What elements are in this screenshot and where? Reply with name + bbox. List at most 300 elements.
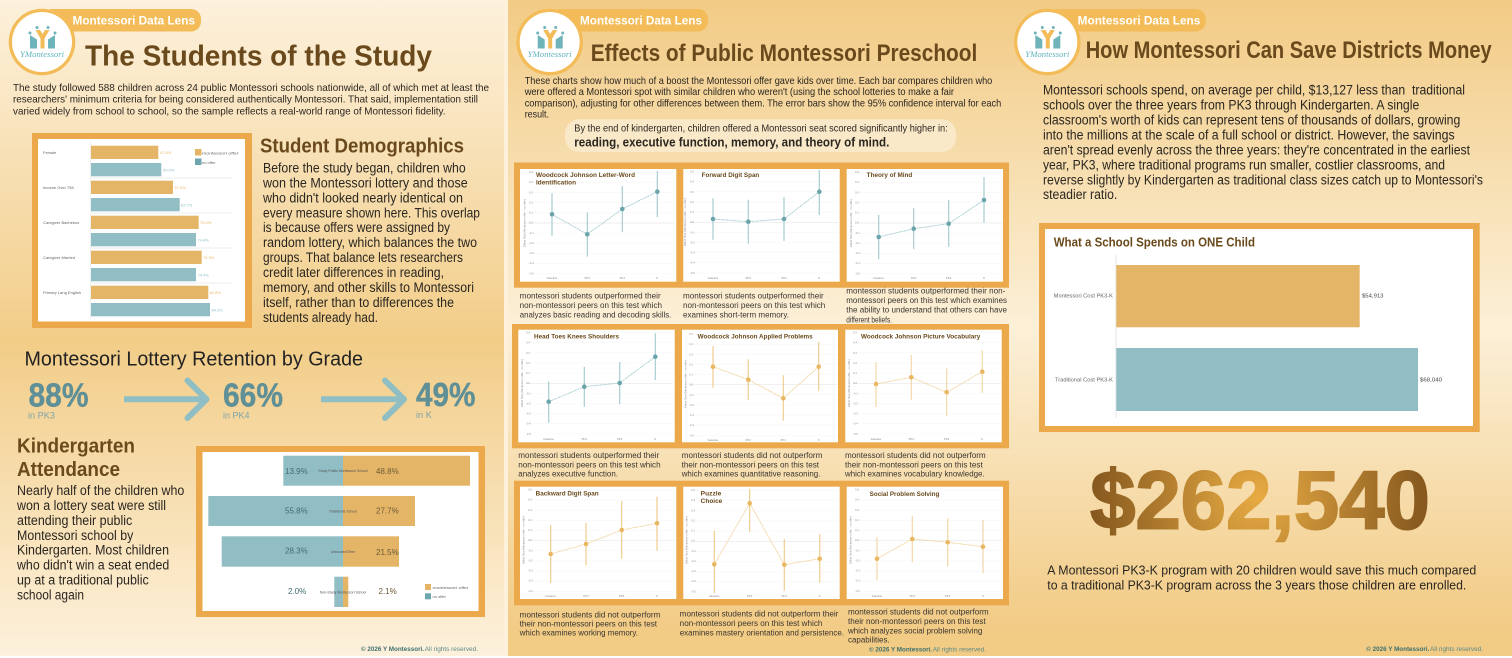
line chart: Woodcock Johnson Picture Vocabulary: 0.4 (853, 341, 857, 345)
captions: row 2: montessori students did not outperform (682, 451, 823, 460)
line chart: Woodcock Johnson Applied Problems: -0.5 (689, 433, 694, 437)
legend (195, 149, 239, 165)
line chart: Social Problem Solving: 0.3 (855, 508, 859, 512)
chart band: row 2 (512, 324, 1009, 448)
line chart: Head Toes Knees Shoulders: -0.5 (526, 432, 531, 436)
row: Unknown/Other: Unknown/Other (331, 550, 356, 554)
panel: Effects of Public Montessori Preschool (508, 0, 1009, 656)
line chart: Woodcock Johnson Letter-Word Identification: Woodcock Johnson Letter-Word (536, 173, 635, 179)
text block: demographics: Before the study began, children who (263, 160, 466, 176)
callout: By the end of kindergarten, children offered a Montessori seat scored significantly higher in: (574, 123, 948, 134)
icon: Y Montessori logo (516, 9, 583, 75)
line chart: Backward Digit Span: 0.4 (528, 498, 532, 502)
captions: row 3: examines mastery orientation and persistence. (680, 628, 844, 637)
line chart: Puzzle Choice: -0.2 (691, 559, 696, 563)
line chart: Woodcock Johnson Applied Problems: -0.4 (689, 423, 694, 427)
brand pill: Montessori Data Lens (72, 15, 195, 27)
line chart: Woodcock Johnson Picture Vocabulary: 0.3 (853, 351, 857, 355)
captions: row 3: their non-montessori peers on this test (848, 617, 986, 626)
icon: Y Montessori logo: YMontessori (20, 50, 64, 59)
line chart: Woodcock Johnson Letter-Word Identification: Identification (536, 180, 576, 186)
line chart: Social Problem Solving: -0.5 (855, 589, 860, 593)
captions: row 1: the ability to understand that others can have (846, 305, 1008, 314)
line chart: Puzzle Choice: 0.3 (691, 508, 695, 512)
text block: savings: year, PK3, where traditional programs run smaller, costlier classrooms, and (1043, 157, 1445, 172)
footer (361, 645, 478, 653)
icon: Y Montessori logo: YMontessori (1025, 50, 1069, 59)
intro text: The study followed 588 children across 24 public Montessori schools nationwide, all of which met at least the (13, 83, 489, 94)
icon: Y Montessori logo: YMontessori (528, 50, 572, 59)
row: Traditional School: 27.7% (376, 506, 399, 516)
line chart: Theory of Mind: 0.1 (855, 211, 859, 215)
line chart: Social Problem Solving: 0.5 (855, 488, 859, 492)
line chart: Head Toes Knees Shoulders: PK4 (617, 437, 623, 441)
line chart: Social Problem Solving: 0.2 (855, 518, 859, 522)
row: Unknown/Other: 28.3% (285, 546, 308, 555)
line chart: Woodcock Johnson Picture Vocabulary: PK4 (944, 437, 950, 441)
row: Caregiver Married: 74.4% (198, 272, 209, 277)
heading: Student Demographics: Student Demographics (260, 136, 464, 158)
line chart: Head Toes Knees Shoulders: 0.2 (526, 361, 530, 365)
footer: All rights reserved. (933, 647, 986, 654)
legend: montessori offer (202, 150, 239, 156)
line chart: Theory of Mind: baseline (873, 276, 884, 280)
row: Caregiver Married (43, 251, 215, 281)
row: Caregiver Married: 78.3% (203, 255, 215, 260)
line chart: Woodcock Johnson Letter-Word Identification: -0.5 (529, 271, 534, 275)
line chart: Forward Digit Span: -0.2 (690, 240, 695, 244)
captions: row 1: analyzes basic reading and decoding skills. (520, 310, 671, 319)
line chart: Forward Digit Span: K (818, 276, 820, 280)
captions: row 3: montessori students did not outperform (520, 610, 661, 619)
caption: savings (1047, 563, 1476, 593)
line chart: Social Problem Solving: baseline (872, 594, 883, 598)
line chart: Social Problem Solving: -0.4 (855, 579, 860, 583)
line chart: Woodcock Johnson Picture Vocabulary: Woodcock Johnson Picture Vocabulary (861, 335, 981, 341)
line chart: Woodcock Johnson Picture Vocabulary: 0.5 (853, 330, 857, 334)
intro text: varied widely from school to school, so the sample reflects a real-world range of Montessori fidelity. (13, 106, 446, 117)
line chart: Woodcock Johnson Letter-Word Identification: 0.1 (529, 211, 533, 215)
line chart: Puzzle Choice: -0.1 (691, 549, 696, 553)
line chart: Woodcock Johnson Applied Problems: 0.0 (689, 383, 693, 387)
line chart: Puzzle Choice: 0.5 (691, 488, 695, 492)
text block: savings: Montessori schools spend, on average per child, $13,127 less than traditional (1043, 83, 1465, 98)
text block: demographics: random lottery, which balances the two (263, 235, 477, 250)
captions: row 2: their non-montessori peers on this test (682, 460, 820, 469)
line chart: Woodcock Johnson Picture Vocabulary: -0.5 (853, 432, 858, 436)
brand pill: Montessori Data Lens (1078, 15, 1200, 27)
captions: row 3: which analyzes social problem solving (847, 626, 982, 635)
line chart: Forward Digit Span: PK3 (746, 276, 751, 280)
line chart: Head Toes Knees Shoulders: Effect Size (Montessori offer - no offer) (520, 359, 524, 407)
legend (425, 584, 469, 599)
bar: Montessori cost: Montessori Cost PK3-K (1054, 294, 1113, 300)
line chart: Backward Digit Span: Backward Digit Span (536, 491, 599, 497)
row: Non-Study Montessori School: Non-Study Montessori School (320, 590, 366, 594)
intro text: result. (525, 109, 549, 120)
captions: row 3: capabilities. (848, 636, 890, 645)
line chart: Woodcock Johnson Applied Problems: 0.4 (689, 342, 693, 346)
line chart: Puzzle Choice (683, 487, 840, 599)
line chart: Social Problem Solving: 0.4 (855, 498, 859, 502)
line chart: Backward Digit Span: PK3 (583, 594, 589, 598)
text block: demographics: credit later differences in reading, (263, 265, 444, 280)
line chart: Woodcock Johnson Letter-Word Identification: 0.3 (529, 190, 533, 194)
row: Female: 50.0% (163, 167, 175, 172)
line chart: Puzzle Choice: -0.4 (691, 579, 696, 583)
line chart: Woodcock Johnson Letter-Word Identification: PK3 (585, 276, 590, 280)
captions: row 3: montessori students did not outperform their (680, 610, 839, 619)
heading: Kindergarten Attendance: Attendance (17, 459, 120, 481)
text block: demographics: itself, rather than to differences the (263, 295, 454, 310)
line chart: Puzzle Choice: baseline (709, 594, 720, 598)
heading: Kindergarten Attendance (17, 435, 135, 481)
bar: Traditional cost: $68,040 (1420, 378, 1442, 384)
line chart: Theory of Mind: PK3 (911, 276, 917, 280)
stat: 66% in PK4: in PK4 (223, 411, 250, 421)
row: Study Public Montessori School (283, 456, 470, 486)
line chart: Backward Digit Span: -0.1 (528, 548, 533, 552)
line chart: Backward Digit Span: PK4 (619, 594, 625, 598)
panel: How Montessori Can Save Districts Money (1009, 0, 1512, 656)
line chart: Social Problem Solving: K (982, 594, 984, 598)
line chart: Theory of Mind: -0.5 (855, 271, 860, 275)
stat: 88% in PK3: 88% (28, 377, 88, 414)
arrow (124, 380, 206, 418)
line chart: Head Toes Knees Shoulders: K (654, 437, 656, 441)
icon: Y Montessori logo (9, 9, 75, 75)
line chart: Forward Digit Span: Effect Size (Montessori offer - no offer) (683, 198, 687, 246)
brand pill (42, 9, 201, 32)
captions: row 1: montessori peers on this test which examines (846, 296, 1007, 305)
text block: demographics: memory, and other skills to Montessori (263, 280, 474, 295)
bar: Traditional cost (1055, 348, 1442, 411)
line chart: Theory of Mind: PK4 (946, 276, 952, 280)
text block: attendance: up at a traditional public (17, 573, 149, 588)
line chart: Head Toes Knees Shoulders (518, 330, 675, 442)
line chart: Theory of Mind: 0.3 (855, 190, 859, 194)
line chart: Puzzle Choice: 0.4 (691, 498, 695, 502)
bar chart: What a School Spends on ONE Child: What a School Spends on ONE Child (1054, 234, 1255, 249)
line chart: Theory of Mind: 0.5 (855, 170, 859, 174)
line chart: Head Toes Knees Shoulders: PK3 (582, 437, 587, 441)
line chart: Forward Digit Span: 0.1 (690, 210, 694, 214)
line chart: Woodcock Johnson Picture Vocabulary: -0.2 (853, 401, 858, 405)
line chart: Head Toes Knees Shoulders: -0.2 (526, 401, 531, 405)
title: Effects of Public Montessori Preschool (591, 40, 977, 67)
footer: © 2026 Y Montessori. (361, 645, 424, 653)
line chart: Woodcock Johnson Picture Vocabulary: -0.3 (853, 412, 858, 416)
row: Traditional School (208, 496, 415, 526)
line chart: Backward Digit Span: -0.3 (528, 569, 533, 573)
line chart: Backward Digit Span: 0.3 (528, 508, 532, 512)
captions: row 1: montessori students outperformed their (520, 292, 661, 301)
line chart: Social Problem Solving: -0.1 (855, 548, 860, 552)
line chart: Woodcock Johnson Applied Problems: 0.2 (689, 362, 693, 366)
text block: attendance: Kindergarten. Most children (17, 543, 169, 558)
line chart: Social Problem Solving: -0.2 (855, 558, 860, 562)
line chart: Head Toes Knees Shoulders: 0.5 (526, 330, 530, 334)
line chart: Woodcock Johnson Applied Problems (682, 330, 838, 442)
line chart: Forward Digit Span: 0.2 (690, 200, 694, 204)
row: Non-Study Montessori School (288, 577, 397, 607)
line chart: Social Problem Solving: -0.3 (855, 569, 860, 573)
row: Primary Lang English: 82.8% (210, 290, 221, 295)
captions: row 1: montessori students outperformed their (683, 292, 824, 301)
line chart: Woodcock Johnson Picture Vocabulary: -0.4 (853, 422, 858, 426)
footer: All rights reserved. (1430, 646, 1483, 653)
captions: row 3: their non-montessori peers on this test (520, 620, 658, 628)
captions: row 2: analyzes executive function. (518, 470, 618, 479)
line chart: Theory of Mind: 0.0 (855, 221, 859, 225)
captions: row 1: non-montessori peers on this test which (520, 301, 662, 310)
row: Female: Female (43, 150, 57, 155)
line chart: Backward Digit Span: 0.5 (528, 488, 532, 492)
line chart: Woodcock Johnson Letter-Word Identification: -0.4 (529, 261, 534, 265)
text block: savings: schools over the three years from PK3 through Kindergarten. A single (1043, 98, 1419, 113)
captions: row 3: montessori students did not outperform (848, 608, 989, 617)
line chart: Woodcock Johnson Picture Vocabulary: baseline (871, 437, 882, 441)
intro text: These charts show how much of a boost the Montessori offer gave kids over time. Each bar compares children who (525, 76, 993, 87)
line chart: Woodcock Johnson Letter-Word Identification: K (656, 276, 658, 280)
line chart: Puzzle Choice: -0.3 (691, 569, 696, 573)
line chart: Forward Digit Span: PK4 (781, 276, 787, 280)
text block: demographics: is because offers were assigned by (263, 220, 450, 235)
text block: attendance: Montessori school by (17, 528, 134, 543)
captions: row 2: montessori students outperformed their (518, 451, 660, 460)
text block: savings (1043, 83, 1483, 202)
line chart: Theory of Mind: Effect Size (Montessori offer - no offer) (849, 199, 853, 247)
line chart: Woodcock Johnson Applied Problems: 0.1 (689, 373, 693, 377)
line chart: Forward Digit Span: 0.0 (690, 220, 694, 224)
line chart: Backward Digit Span: 0.2 (528, 518, 532, 522)
line chart: Woodcock Johnson Picture Vocabulary: 0.0 (853, 381, 857, 385)
brand pill (550, 9, 708, 32)
line chart: Head Toes Knees Shoulders: Head Toes Knees Shoulders (534, 335, 620, 341)
line chart: Puzzle Choice: 0.1 (691, 529, 695, 533)
line chart: Backward Digit Span: baseline (545, 594, 556, 598)
captions: row 3: non-montessori peers on this test which (680, 619, 822, 628)
intro text: were offered a Montessori spot with similar children who weren't (using the school lotteries to make a fair (524, 87, 955, 98)
chart band: row 1 (514, 162, 1009, 288)
text block: attendance: school again (17, 588, 84, 602)
line chart: Woodcock Johnson Letter-Word Identification: 0.0 (529, 221, 533, 225)
line chart: Woodcock Johnson Applied Problems: PK3 (746, 438, 751, 442)
row: Study Public Montessori School: 13.9% (285, 467, 308, 476)
line chart: Forward Digit Span: baseline (708, 276, 719, 280)
line chart: Woodcock Johnson Applied Problems: Woodcock Johnson Applied Problems (698, 335, 813, 341)
line chart: Theory of Mind: 0.2 (855, 200, 859, 204)
line chart: Woodcock Johnson Picture Vocabulary (845, 330, 1002, 442)
line chart: Head Toes Knees Shoulders: -0.3 (526, 412, 531, 416)
line chart: Social Problem Solving: 0.1 (855, 528, 859, 532)
row: Study Public Montessori School: 48.8% (376, 467, 399, 476)
captions: row 2: non-montessori peers on this test which (518, 460, 661, 469)
line chart: Head Toes Knees Shoulders: 0.3 (526, 351, 530, 355)
text block: attendance: Nearly half of the children who (17, 483, 184, 498)
big number: $262,540 (1090, 453, 1430, 546)
line chart: Forward Digit Span (683, 169, 840, 282)
line chart: Woodcock Johnson Letter-Word Identification: baseline (547, 276, 558, 280)
row: Female (43, 146, 175, 176)
line chart: Backward Digit Span: -0.5 (528, 589, 533, 593)
line chart: Puzzle Choice: 0.2 (691, 518, 695, 522)
footer: All rights reserved. (425, 646, 478, 653)
line chart: Woodcock Johnson Picture Vocabulary: Effect Size (Montessori offer - no offer) (847, 359, 851, 407)
diverging bar chart: kindergarten attendance (196, 446, 485, 617)
row: Caregiver Bachelors: Caregiver Bachelors (43, 220, 79, 225)
line chart: Woodcock Johnson Letter-Word Identification: -0.3 (529, 251, 534, 255)
line chart: Head Toes Knees Shoulders: -0.1 (526, 391, 531, 395)
intro text: researchers' minimum criteria for being considered authentically Montessori. That said, implementation still (13, 95, 478, 106)
row: Caregiver Married: Caregiver Married (43, 255, 75, 260)
text block: demographics: won the Montessori lottery and those (262, 175, 468, 190)
footer (869, 646, 986, 654)
row: Traditional School: 55.8% (285, 506, 308, 516)
row: Income Over 75K (43, 181, 193, 211)
heading: retention: Montessori Lottery Retention by Grade (24, 348, 363, 370)
line chart: Woodcock Johnson Letter-Word Identification: 0.5 (529, 170, 533, 174)
brand pill: Montessori Data Lens (580, 15, 702, 27)
line chart: Social Problem Solving: Social Problem Solving (870, 492, 940, 498)
text block: demographics (262, 160, 480, 325)
captions: row 2 (518, 451, 986, 479)
line chart: Woodcock Johnson Letter-Word Identification: 0.4 (529, 180, 533, 184)
line chart: Puzzle Choice: Effect Size (Montessori offer - no offer) (684, 516, 688, 564)
line chart: Forward Digit Span: -0.3 (690, 251, 695, 255)
captions: row 3: which examines working memory. (519, 629, 638, 638)
captions: row 1: non-montessori peers on this test which (683, 301, 825, 310)
line chart: Theory of Mind: 0.4 (855, 180, 859, 184)
line chart: Woodcock Johnson Picture Vocabulary: PK3 (909, 437, 914, 441)
line chart: Backward Digit Span: Effect Size (Montessori offer - no offer) (522, 516, 526, 564)
text block: savings: classroom's worth of kids can represent tens of thousands of dollars, growing (1043, 113, 1460, 128)
line chart: Woodcock Johnson Applied Problems: -0.1 (689, 393, 694, 397)
line chart: Puzzle Choice: PK3 (747, 594, 753, 598)
footer (1366, 645, 1483, 653)
line chart: Theory of Mind: -0.1 (855, 231, 860, 235)
text block: attendance (16, 483, 184, 602)
line chart: Woodcock Johnson Letter-Word Identification: PK4 (620, 276, 625, 280)
line chart: Theory of Mind: Theory of Mind (867, 173, 913, 179)
line chart: Head Toes Knees Shoulders: 0.1 (526, 371, 530, 375)
bar: Montessori cost (1054, 265, 1384, 327)
row: Caregiver Bachelors: 76.0% (200, 220, 212, 225)
captions: row 1: different beliefs. (846, 316, 892, 324)
line chart: Forward Digit Span: 0.4 (690, 180, 694, 184)
footer: © 2026 Y Montessori. (1366, 645, 1429, 653)
legend: montessori offer (432, 585, 469, 590)
captions: row 1: montessori students outperformed their non- (846, 287, 1006, 296)
row: Primary Lang English (43, 286, 223, 316)
line chart: Puzzle Choice: PK4 (782, 594, 787, 598)
line chart: Theory of Mind: K (983, 276, 985, 280)
line chart: Woodcock Johnson Applied Problems: 0.5 (689, 332, 693, 336)
row: Traditional School: Traditional School (329, 509, 357, 513)
line chart: Social Problem Solving: Effect Size (Montessori offer - no offer) (848, 516, 852, 564)
text block: demographics: students already had. (263, 310, 378, 325)
intro text (13, 83, 489, 117)
row: Non-Study Montessori School: 2.0% (288, 587, 306, 596)
line chart: Puzzle Choice: Choice (701, 499, 723, 505)
row: Income Over 75K: 62.7% (181, 202, 193, 207)
callout: reading, executive function, memory, and theory of mind. (574, 136, 889, 150)
bar chart: What a School Spends on ONE Child (1039, 223, 1480, 432)
brand pill (1047, 9, 1206, 32)
intro text: comparison), adjusting for other differences between them. The error bars show the 95% confidence interval for each (525, 98, 1001, 109)
row: Unknown/Other: 21.5% (376, 548, 399, 557)
arrow (321, 380, 404, 418)
footer: © 2026 Y Montessori. (869, 646, 932, 654)
line chart: Backward Digit Span: 0.1 (528, 528, 532, 532)
line chart: Puzzle Choice: K (819, 594, 821, 598)
captions: row 1 (520, 287, 1008, 324)
row: Income Over 75K: 57.9% (174, 185, 186, 190)
text block: demographics: groups. That balance lets researchers (263, 250, 463, 265)
line chart: Woodcock Johnson Applied Problems: -0.2 (689, 403, 694, 407)
stat: 49% in K: in K (416, 410, 432, 420)
text block: attendance: attending their public (17, 513, 133, 528)
line chart: Head Toes Knees Shoulders: 0.4 (526, 341, 530, 345)
text block: savings: into the millions at the scale of a full school or district. However, the savings (1043, 128, 1455, 142)
line chart: Social Problem Solving: 0.0 (855, 538, 859, 542)
captions: row 2: which examines vocabulary knowledge. (844, 470, 985, 479)
line chart: Woodcock Johnson Applied Problems: K (818, 438, 820, 442)
chart band: row 3 (514, 481, 1009, 605)
captions: row 2: which examines quantitative reasoning. (681, 470, 820, 479)
line chart: Backward Digit Span: 0.0 (528, 538, 532, 542)
line chart: Social Problem Solving: PK3 (910, 594, 915, 598)
captions: row 2: montessori students did not outperform (845, 451, 986, 460)
line chart: Backward Digit Span: -0.4 (528, 579, 533, 583)
heading: Kindergarten Attendance: Kindergarten (17, 435, 135, 457)
captions: row 2: their non-montessori peers on this test (845, 460, 983, 469)
text block: demographics: who didn't looked nearly identical on (262, 190, 463, 205)
stat: 88% in PK3: in PK3 (28, 411, 55, 421)
bar chart: student demographics (32, 133, 252, 328)
line chart: Head Toes Knees Shoulders: baseline (543, 437, 554, 441)
legend: no offer (202, 160, 216, 165)
line chart: Woodcock Johnson Applied Problems: Effect Size (Montessori offer - no offer) (684, 360, 688, 408)
line chart: Woodcock Johnson Applied Problems: -0.3 (689, 413, 694, 417)
line chart: Woodcock Johnson Applied Problems: PK4 (781, 438, 786, 442)
line chart: Woodcock Johnson Letter-Word Identification (520, 169, 676, 282)
line chart: Head Toes Knees Shoulders: -0.4 (526, 422, 531, 426)
row: Unknown/Other (222, 536, 399, 567)
stat: 66% in PK4: 66% (223, 377, 283, 414)
caption: savings: to a traditional PK3-K program across the 3 years those children are enrolled. (1047, 578, 1466, 593)
line chart: Forward Digit Span: 0.3 (690, 190, 694, 194)
line chart: Woodcock Johnson Picture Vocabulary: 0.1 (853, 371, 857, 375)
intro text (524, 76, 1001, 120)
captions: row 1: examines short-term memory. (683, 310, 789, 319)
title: The Students of the Study (85, 41, 432, 73)
line chart: Theory of Mind: -0.2 (855, 241, 860, 245)
line chart: Woodcock Johnson Applied Problems: baseline (708, 438, 719, 442)
line chart: Theory of Mind (847, 169, 1003, 282)
line chart: Theory of Mind: -0.4 (855, 261, 860, 265)
line chart: Woodcock Johnson Picture Vocabulary: 0.2 (853, 361, 857, 365)
line chart: Puzzle Choice: Puzzle (701, 491, 722, 497)
text block: demographics: every measure shown here. This overlap (263, 205, 480, 220)
line chart: Woodcock Johnson Letter-Word Identification: Effect Size (Montessori offer - no offer) (522, 199, 526, 247)
row: Caregiver Bachelors (43, 216, 212, 246)
text block: attendance: won a lottery seat were still (16, 498, 166, 513)
text block: savings: steadier ratio. (1043, 187, 1117, 202)
row: Non-Study Montessori School: 2.1% (378, 587, 397, 596)
line chart: Theory of Mind: -0.3 (855, 251, 860, 255)
callout (565, 119, 956, 152)
